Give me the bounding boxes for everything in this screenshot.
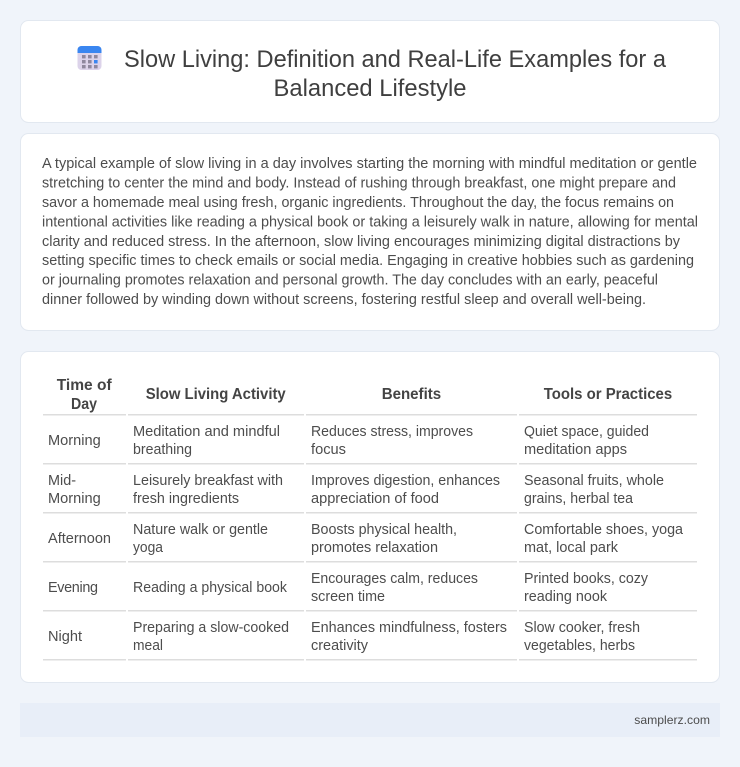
icon: calendar [78,46,102,70]
table row: morning: Morning [48,433,101,449]
table row: afternoon: Comfortable shoes, yoga [524,522,683,538]
table row: night: Night [48,629,82,645]
text block: slow living description: setting specific times to check emails or social media. Engaging in creative hobbies such as gardening [42,253,694,269]
text block: slow living description: intentional activities like reading a physical book or taking a leisurely walk in nature, allowing for mental [42,214,698,230]
table row: night: meal [133,638,163,654]
text block: slow living description: A typical example of slow living in a day involves starting the morning with mindful meditation or gentle [42,156,697,172]
table row: afternoon: promotes relaxation [311,540,438,556]
panel: table card [20,352,720,682]
table row: mid-morning: Leisurely breakfast with [133,473,283,489]
table row: evening [43,571,697,612]
table row: evening: Reading a physical book [133,580,288,596]
table row: morning: meditation apps [524,442,627,458]
panel: intro paragraph card [20,134,720,330]
table header: Slow Living Activity [146,386,286,403]
table row: evening: Evening [48,580,98,596]
table row: mid-morning: Seasonal fruits, whole [524,473,664,489]
table header: Day [71,396,97,413]
table row: mid-morning: grains, herbal tea [524,491,633,507]
table row: morning: focus [311,442,346,458]
table row: night [43,620,697,660]
text block: slow living description: or journaling promotes relaxation and personal growth. The day concludes with an early, peaceful [42,273,658,289]
table row: mid-morning: Morning [48,491,101,507]
table row: afternoon: Nature walk or gentle [133,522,268,538]
table row: afternoon: Boosts physical health, [311,522,457,538]
table row: morning: Reduces stress, improves [311,424,473,440]
table row: evening: Printed books, cozy [524,571,649,587]
panel: header card [20,20,720,122]
table row: mid-morning [43,473,697,514]
table row: mid-morning: appreciation of food [311,491,439,507]
table row: mid-morning: Improves digestion, enhances [311,473,500,489]
footer bar [20,703,720,737]
table header [43,377,697,416]
table row: evening: reading nook [524,589,608,605]
table row: mid-morning: fresh ingredients [133,491,239,507]
table row: morning: Meditation and mindful [133,424,280,440]
table row: morning [43,424,697,464]
table row: evening: Encourages calm, reduces [311,571,478,587]
table row: evening: screen time [311,589,385,605]
title [124,46,666,102]
table header: Time of [57,377,112,394]
table header: Benefits [382,386,442,403]
table row: night: Enhances mindfulness, fosters [311,620,507,636]
table row: afternoon [43,522,697,562]
table row: night: Slow cooker, fresh [524,620,640,636]
footer bar: samplerz.com [634,713,710,727]
text block: slow living description: dinner followed by winding down without screens, fostering restful sleep and overall well-being. [42,292,646,308]
title: Balanced Lifestyle [274,75,466,102]
title: Slow Living: Definition and Real-Life Examples for a [124,46,666,73]
table row: night: creativity [311,638,369,654]
table row: mid-morning: Mid- [48,473,76,489]
table header: Tools or Practices [544,386,673,403]
table row: morning: breathing [133,442,192,458]
table row: night: vegetables, herbs [524,638,635,654]
table row: morning: Quiet space, guided [524,424,649,440]
text block: slow living description [42,156,698,308]
text block: slow living description: stretching to center the mind and body. Instead of rushing through breakfast, one might prepare and [42,175,676,191]
table row: afternoon: yoga [133,540,163,556]
text block: slow living description: clarity and reduced stress. In the afternoon, slow living encourages minimizing digital distractions by [42,234,681,250]
table row: afternoon: Afternoon [48,531,111,547]
table row: afternoon: mat, local park [524,540,619,556]
text block: slow living description: savor a homemade meal using fresh, organic ingredients. Throughout the day, the focus remains on [42,195,674,211]
table row: night: Preparing a slow-cooked [133,620,289,636]
